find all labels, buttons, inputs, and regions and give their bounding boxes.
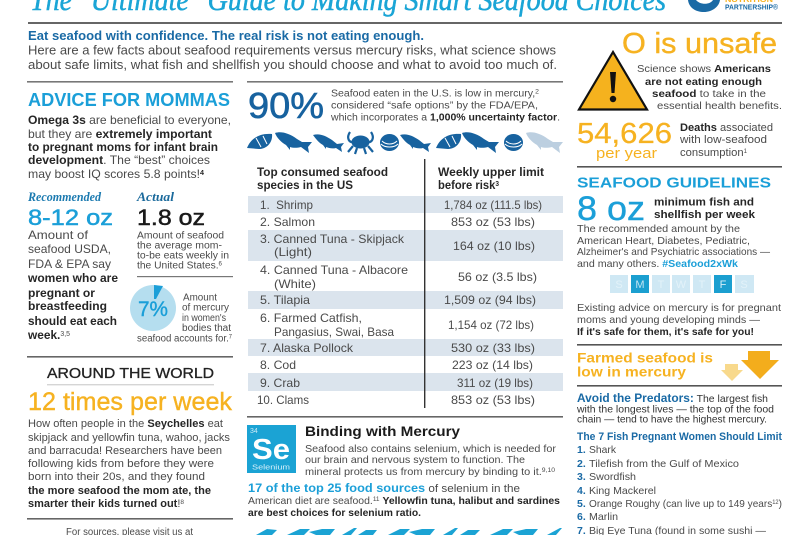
table rows: 164 oz (10 lbs) [453,239,535,253]
omega text: but they are extremely important [28,127,212,141]
body text: How often people in the Seychelles eat [28,418,223,430]
icon: selenium tile [247,425,296,473]
fish list: 4. [577,485,586,497]
science text: seafood to take in the [652,88,766,100]
table rows [257,198,542,407]
fish list: Swordfish [589,471,636,483]
fish list: 6. [577,511,586,523]
recommended: breastfeeding [28,299,107,313]
deaths stat: consumption [680,147,742,159]
omega text: Omega 3s are beneficial to everyone, [28,113,231,127]
big stat: 8 oz [577,190,645,228]
mercury advice text [577,302,781,338]
fish list: 5. [577,498,586,510]
heading: SEAFOOD GUIDELINES [577,174,771,192]
mercury caption: of mercury [182,302,229,314]
table rows: 1,509 oz (94 lbs) [444,293,536,307]
fish list: 12 [772,500,779,506]
intro text: Avoid the Predators: The largest fish [577,391,768,405]
body text: and barracuda! Researchers have been [28,445,222,457]
calendar: two seafood days: F [720,279,727,291]
recommended: pregnant or [28,286,95,300]
icons: blue fish row [256,528,562,535]
body text: Alzheimer's and Psychiatric associations — [577,246,770,258]
panel: around the world [28,366,232,510]
table rows: 1,784 oz (111.5 lbs) [444,198,542,212]
omega text: 4 [200,170,204,177]
table rows: 530 oz (33 lbs) [451,341,535,355]
actual: 6 [219,262,223,268]
omega text [28,113,231,181]
fish list [577,444,782,535]
heading: Farmed seafood is [577,350,713,366]
icon: selenium tile: Selenium [252,462,290,472]
selenium sources text: are best choices for selenium ratio. [248,507,421,519]
actual: the average mom- [137,240,222,252]
intro text [576,391,774,426]
logo [688,0,778,12]
table header [257,165,544,192]
body text: smarter their kids turned out! [28,498,180,510]
table rows: 10. Clams [257,393,309,407]
actual: the United States. [137,260,216,272]
table rows: 1,154 oz (72 lbs) [448,318,534,332]
stat: 90 percent: which incorporates a 1,000% uncertainty factor . [330,112,560,124]
table rows: 853 oz (53 lbs) [451,215,535,229]
table rows: 5. Tilapia [260,293,310,307]
table rows: 853 oz (53 lbs) [451,393,535,407]
table rows: 6. Farmed Catfish, [260,311,362,325]
omega text: development. The “best” choices [28,153,210,167]
icons: seafood row [247,132,563,154]
table bands [248,196,563,391]
table rows: (Light) [274,245,312,259]
body text: 9,10 [542,467,555,474]
icon: large down arrow [741,351,779,379]
big stat: 12 times per week [28,388,232,416]
body text: and many others. #Seafood2xWk [577,258,738,270]
science text: are not eating enough [645,76,762,88]
body text [577,223,770,270]
recommended: 3,5 [60,331,70,338]
panel: farmed seafood [577,350,779,381]
table header: before risk [438,178,499,192]
deaths stat: with low-seafood [679,134,767,146]
panel: 0 is unsafe [577,28,782,162]
recommended: Amount of [28,228,89,242]
pie chart: 7 percent [130,285,176,331]
fish list: Orange Roughy (can live up to 149 years [589,498,780,510]
mercury caption: 7 [229,334,233,340]
pie chart: 7 percent: 7% [138,298,168,321]
stat: 90 percent: Seafood eaten in the U.S. is low in mercury, [331,88,525,100]
deaths stat: Deaths associated [680,122,773,134]
mercury advice text: moms and young developing minds — [577,314,760,326]
panel: farmed seafood: low in mercury [577,364,687,380]
intro text: about safe limits, what fish and shellfish you should choose and what to avoid too much of. [28,58,557,72]
table rows: Pangasius, Swai, Basa [274,325,394,339]
big stat: shellfish per week [654,209,756,221]
intro text: Eat seafood with confidence. The real risk is not eating enough. [28,29,424,43]
big stat [577,190,756,228]
body text: our brain and nervous system to function. The [305,454,525,466]
icon: selenium tile: 34 [250,428,258,435]
table header: Weekly upper limit [438,165,544,179]
calendar: two seafood days [610,275,754,293]
mercury caption: Amount [183,292,217,304]
fish list: King Mackerel [589,485,656,497]
stat: 90 percent: 2 [535,88,539,96]
icon: small down arrow [721,364,743,381]
omega text: may boost IQ scores 5.8 points! [28,167,197,181]
body text: The recommended amount by the [577,223,740,235]
body text: skipjack and yellowfin tuna, wahoo, jacks [28,432,230,444]
calendar: two seafood days: S [615,279,623,291]
intro text: chain — tend to have the highest mercury. [577,414,767,426]
recommended: should eat each [28,314,117,328]
actual: to-be eats weekly in [137,250,229,262]
fish list: 1. [577,444,586,456]
table: species and weekly upper limit [248,159,563,408]
panel: advice for mommas [27,90,233,344]
heading: ADVICE FOR MOMMAS [28,90,230,110]
selenium sources text: 17 of the top 25 food sources of selenium in the [248,481,520,495]
table rows: 223 oz (14 lbs) [452,358,533,372]
body text: Seafood also contains selenium, which is needed for [305,443,557,455]
recommended: women who are [27,271,118,285]
table header: 3 [495,181,499,188]
selenium sources text [248,481,560,519]
calendar: two seafood days: W [676,279,687,291]
icon: selenium tile: Se [252,434,290,466]
body text: mineral protects us from mercury by binding to it. [305,466,532,478]
logo: PARTNERSHIP® [725,2,778,12]
body text: American Heart, Diabetes, Pediatric, [577,235,750,247]
fish list: Marlin [589,511,618,523]
recommended [27,189,118,342]
table rows: 3. Canned Tuna - Skipjack [260,232,405,246]
mercury caption: bodies that [182,323,231,334]
selenium sources text: Yellowfin tuna, halibut and sardines [382,495,560,507]
science text: essential health benefits. [657,100,782,112]
actual: 1.8 oz [137,205,205,230]
table rows: 56 oz (3.5 lbs) [458,270,537,284]
panel: binding with mercury [247,424,562,535]
mercury caption: in women's [182,313,226,324]
stat: 90 percent [248,85,560,126]
fish list: ) [779,498,782,510]
mercury caption: seafood accounts for. [137,334,232,344]
table rows: 9. Crab [260,376,300,390]
table header: Top consumed seafood [257,165,388,179]
stat: 90 percent: 90% [248,85,324,126]
body text: the more seafood the mom ate, the [28,485,211,497]
body text: 8 [180,499,184,506]
calendar: two seafood days: M [635,279,645,291]
recommended: seafood USDA, [28,242,111,256]
table rows: 2. Salmon [260,215,315,229]
calendar: two seafood days: T [658,279,665,291]
selenium sources text: American diet are seafood. [248,495,374,507]
body text: following kids from before they were [28,458,214,470]
science text: Science shows Americans [637,63,771,75]
heading: AROUND THE WORLD [47,366,214,382]
fish list: Shark [589,444,617,456]
body text [28,418,230,510]
big stat: minimum fish and [654,196,754,208]
body text: born into their 20s, and they found [28,471,205,483]
fish list: Tilefish from the Gulf of Mexico [589,458,739,470]
table rows: (White) [274,277,316,291]
calendar: two seafood days: S [740,279,748,291]
mercury caption [137,292,233,344]
recommended: Recommended [27,189,101,204]
actual [136,189,229,272]
omega text: to pregnant moms for infant brain [28,140,218,154]
fish list: 2. [577,458,586,470]
table rows: 7. Alaska Pollock [260,341,354,355]
table rows: 8. Cod [260,358,296,372]
icon: crab [348,132,373,154]
recommended: week. [27,328,60,342]
fish list: 3. [577,471,586,483]
stat: 90 percent: considered “safe options” by the FDA/EPA, [331,100,538,112]
recommended: 8-12 oz [28,205,113,230]
calendar: two seafood days: T [699,279,706,291]
heading: O is unsafe [622,28,777,60]
intro text [28,29,557,72]
intro text: Here are a few facts about seafood requirements versus mercury risks, what science shows [28,44,556,58]
selenium sources text: 11 [373,496,380,503]
science text [637,63,782,112]
table rows: 1. Shrimp [260,198,313,212]
intro text: with the longest lives — the top of the food [576,404,774,416]
body text [305,443,557,478]
recommended: FDA & EPA say [28,257,111,271]
deaths stat: 54,626 [577,118,672,150]
icon: warning triangle [579,52,647,110]
mercury advice text: Existing advice on mercury is for pregnant [577,302,781,314]
actual: Amount of seafood [137,230,224,242]
deaths stat [577,118,773,162]
table rows: 311 oz (19 lbs) [457,376,533,390]
panel: seafood guidelines [577,174,781,338]
mercury advice text: If it's safe for them, it's safe for you! [577,326,754,338]
heading: Binding with Mercury [305,424,461,439]
deaths stat: per year [596,145,657,162]
list heading: The 7 Fish Pregnant Women Should Limit [577,431,782,443]
deaths stat: 1 [744,149,748,155]
actual: Actual [136,189,174,204]
table rows: 4. Canned Tuna - Albacore [260,263,408,277]
panel: avoid the predators [576,391,782,535]
table header: species in the US [257,178,353,192]
